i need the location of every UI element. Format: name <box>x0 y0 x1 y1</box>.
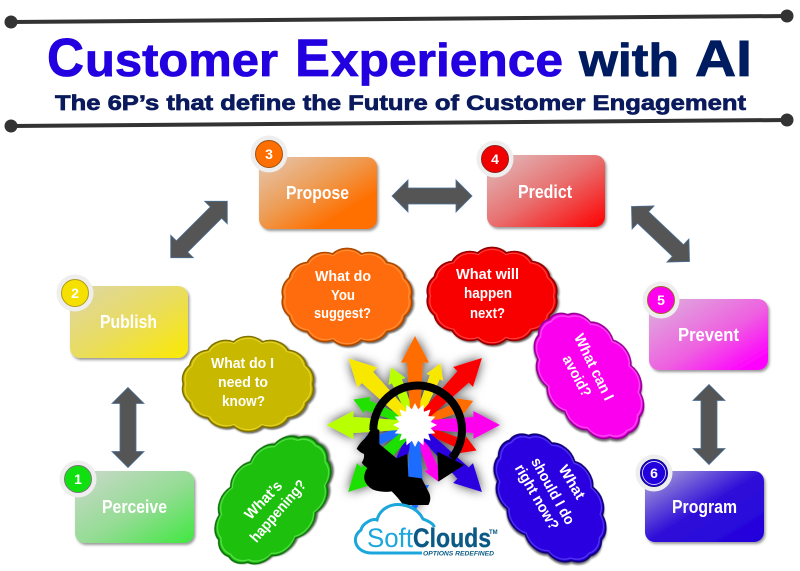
subtitle: The 6P’s that define the Future of Customer Engagement <box>55 91 746 115</box>
cloud: what's happening <box>192 414 354 571</box>
step 2: publish: 2 <box>71 285 79 301</box>
cloud: what can i avoid: What can I <box>570 331 617 403</box>
cloud: what should i do right now: What <box>555 462 588 502</box>
step 1: perceive: 1 <box>74 471 82 487</box>
title: xperience <box>331 34 563 86</box>
bottom rule <box>4 114 794 132</box>
step 5: prevent: 5 <box>657 292 665 308</box>
cloud: what's happening: What’s <box>241 478 286 523</box>
cloud: what do you suggest: suggest? <box>314 305 371 322</box>
title: AI <box>695 30 752 87</box>
cloud: what do i need to know: need to <box>218 374 268 391</box>
cloud: what do you suggest <box>282 248 412 346</box>
cloud: what's happening: happening? <box>247 477 310 546</box>
step 4: predict: Predict <box>518 182 572 202</box>
logo: SoftClouds: OPTIONS REDEFINED <box>423 550 495 558</box>
top rule <box>4 10 794 28</box>
arrow: propose to predict <box>392 180 472 212</box>
step 3: propose: 3 <box>265 146 273 162</box>
step 5: prevent: Prevent <box>678 325 739 345</box>
step 4: predict <box>476 140 605 227</box>
step 3: propose <box>250 136 377 229</box>
cloud: what should i do right now: should I do <box>527 455 578 528</box>
step 5: prevent <box>642 282 768 370</box>
step 6: program <box>636 454 764 542</box>
title: E <box>295 29 330 88</box>
step 6: program: Program <box>672 497 737 517</box>
cloud: what will happen next: next? <box>470 305 505 322</box>
cloud: what will happen next: What will <box>456 266 519 283</box>
cloud: what will happen next <box>427 247 557 345</box>
title: ustomer <box>85 34 278 86</box>
cloud: what do i need to know: know? <box>222 393 265 410</box>
step 4: predict: 4 <box>491 151 499 167</box>
title <box>47 28 752 88</box>
cloud: what do i need to know: What do I <box>211 355 274 372</box>
arrow: perceive to publish <box>112 388 144 468</box>
cloud: what do you suggest: You <box>331 287 355 304</box>
logo: SoftClouds: Soft <box>367 523 414 553</box>
step 6: program: 6 <box>650 465 658 481</box>
title: with <box>578 34 679 86</box>
cloud: what can i avoid <box>512 293 666 459</box>
arrow: prevent to program <box>693 384 725 464</box>
step 1: perceive: Perceive <box>102 497 167 517</box>
arrow: predict to prevent <box>620 195 701 273</box>
cloud: what will happen next: happen <box>464 285 512 302</box>
logo: SoftClouds <box>355 505 498 558</box>
step 2: publish: Publish <box>100 312 157 332</box>
cloud: what should i do right now: right now? <box>511 461 562 533</box>
step 3: propose: Propose <box>286 183 349 203</box>
step 2: publish <box>56 274 188 358</box>
logo: SoftClouds: Clouds <box>413 523 491 553</box>
cloud: what do you suggest: What do <box>315 268 371 285</box>
cloud: what do i need to know <box>183 336 313 432</box>
icon: head with radiating arrows <box>327 336 500 512</box>
logo: SoftClouds: TM <box>489 530 498 536</box>
title: C <box>47 28 84 88</box>
arrow: publish to propose <box>159 190 239 269</box>
cloud: what can i avoid: avoid? <box>558 352 595 400</box>
step 1: perceive <box>60 460 194 543</box>
cloud: what should i do right now <box>471 413 629 571</box>
